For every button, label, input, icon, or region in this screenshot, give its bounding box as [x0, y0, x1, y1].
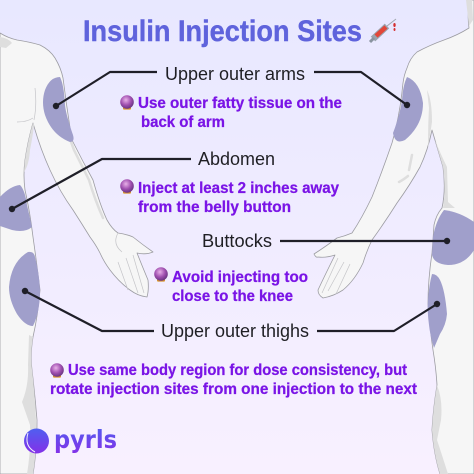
left body figure: [0, 33, 153, 474]
tip: upper outer arms: Use outer fatty tissue on the: [138, 95, 342, 112]
tip: buttocks: Avoid injecting too: [172, 269, 308, 286]
tip: upper outer arms: [120, 95, 342, 131]
tip: abdomen: Inject at least 2 inches away: [138, 180, 339, 197]
logo: pyrls: [24, 425, 117, 454]
injection zone: right thigh: [428, 274, 447, 348]
label: abdomen: Abdomen: [198, 149, 275, 169]
label: upper outer thighs: [22, 288, 440, 341]
injection zone: left thigh: [9, 252, 40, 326]
tip: abdomen: from the belly button: [138, 199, 291, 216]
tip: abdomen: [120, 179, 339, 216]
icon: syringe: [370, 19, 396, 42]
label: upper outer thighs: Upper outer thighs: [161, 321, 309, 341]
right body figure: [314, 0, 474, 474]
label: abdomen: [9, 149, 275, 212]
injection zone: left upper arm: [43, 77, 74, 142]
injection zone: abdomen: [0, 185, 32, 231]
label: upper outer arms: Upper outer arms: [165, 64, 305, 84]
tip: rotation: [50, 362, 417, 398]
tip: rotation: Use same body region for dose consistency, but: [68, 362, 407, 379]
tip: buttocks: close to the knee: [172, 288, 293, 305]
tip: rotation: rotate injection sites from one injection to the next: [50, 381, 417, 398]
logo: pyrls: pyrls: [54, 425, 117, 454]
tip: buttocks: [154, 267, 308, 305]
label: buttocks: [202, 231, 450, 251]
tip: upper outer arms: back of arm: [141, 114, 225, 131]
injection zone: right upper arm: [393, 77, 423, 141]
title: Insulin Injection Sites: [83, 15, 362, 48]
label: buttocks: Buttocks: [202, 231, 272, 251]
label: upper outer arms: [53, 64, 410, 109]
injection zone: right buttock: [432, 210, 474, 265]
